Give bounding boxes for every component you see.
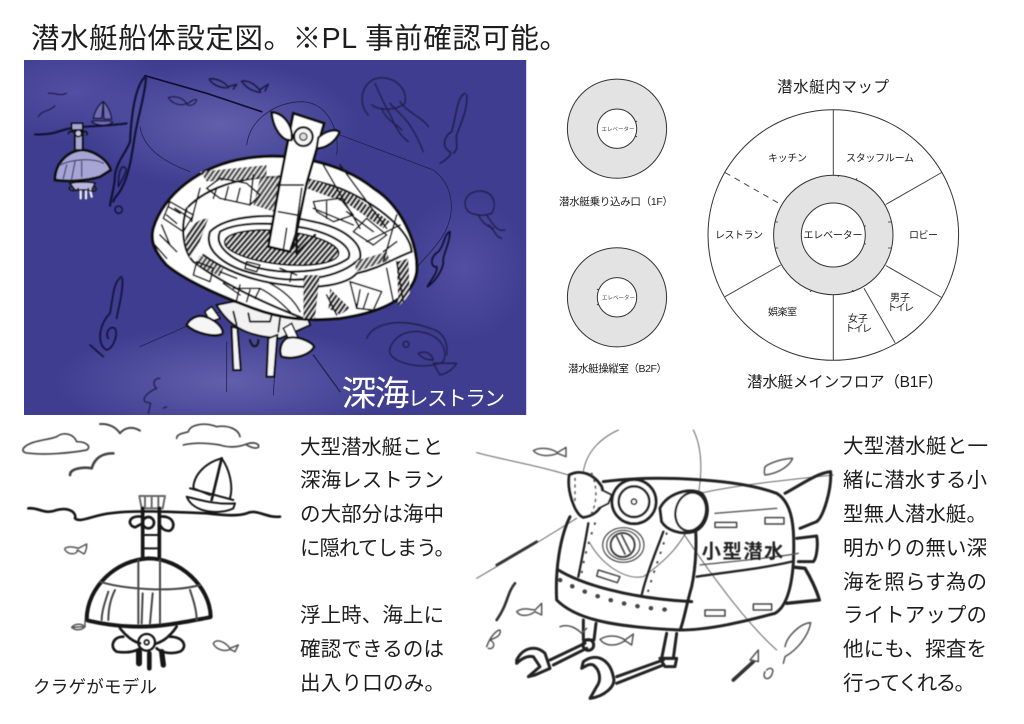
text block: submarine hidden underwater: 出入り口のみ。 (300, 672, 445, 695)
panel: surface jellyfish sketch (23, 424, 280, 668)
vents (597, 518, 784, 616)
text block: small unmanned submersible description: 緒に潜水する小 (843, 469, 987, 492)
restaurant logo text: 深海レストラン (342, 376, 505, 414)
clouds and birds (23, 424, 259, 475)
text block: submarine hidden underwater: 深海レストラン (300, 469, 444, 492)
panel: deep sea restaurant illustration (24, 60, 526, 415)
text block: small unmanned submersible description: 他にも、探査を (843, 638, 987, 661)
dome body (152, 156, 417, 320)
caption: 1F: 潜水艇乗り込み口（1F） (559, 195, 673, 208)
manipulator arms (517, 620, 677, 698)
submarine restaurant main body (152, 112, 417, 377)
small fish and seahorses (487, 447, 811, 680)
chart: main floor B1F map: ロビー (909, 230, 938, 242)
diagram: boarding floor 1F (567, 79, 667, 178)
text block: submarine hidden underwater (300, 436, 455, 695)
central hatched floor (223, 225, 340, 270)
small fish group (168, 79, 268, 105)
caption: B2F: 潜水艇操縦室（B2F） (568, 362, 667, 375)
text block: small unmanned submersible description: 行ってくれる。 (843, 672, 975, 695)
long squid (110, 77, 146, 213)
seahorse top right (440, 93, 467, 163)
title: 潜水艇船体設定図。※PL 事前確認可能。 (31, 23, 568, 55)
heading: submarine map: 潜水艇内マップ (777, 78, 889, 96)
small seahorse bottom (144, 378, 167, 413)
deep blue sea background (24, 60, 526, 415)
chart: main floor B1F map: トイレ (845, 324, 872, 335)
diagram: control room B2F (567, 248, 667, 347)
text block: small unmanned submersible description: 型無人潜水艇。 (843, 503, 987, 526)
furniture details (155, 165, 403, 315)
text block: small unmanned submersible description: ライトアップの (843, 604, 987, 627)
caption: modelled on jellyfish: クラゲがモデル (33, 677, 157, 697)
small jellyfish right (465, 191, 505, 238)
chart: main floor B1F map: スタッフルーム (846, 152, 914, 164)
text block: submarine hidden underwater: 浮上時、海上に (300, 604, 444, 627)
chart: main floor B1F map: キッチン (768, 152, 807, 164)
chart: main floor B1F map: 女子 (848, 312, 868, 325)
chart: main floor B1F map: 娯楽室 (768, 306, 797, 318)
jellyfish top right (362, 78, 428, 152)
lower hull, legs and lamps (187, 302, 314, 377)
text block: small unmanned submersible description: 明かりの無い深 (843, 537, 987, 560)
dark wall hatching (185, 165, 410, 318)
jellyfish submarine (87, 496, 211, 668)
panel: floor diagrams (559, 78, 959, 391)
fishing line (145, 76, 262, 112)
rivets (560, 523, 673, 610)
surface scene: birds, boat and small submarine (35, 93, 127, 198)
heading: main floor B1F: 潜水艇メインフロア（B1F） (747, 373, 943, 391)
chart: main floor B1F map: トイレ (887, 303, 914, 314)
chart: main floor B1F map (708, 110, 959, 360)
seahorse left (90, 277, 122, 357)
round hatch (603, 528, 644, 562)
text block: small unmanned submersible description (843, 435, 988, 695)
side lights (569, 472, 710, 534)
sailboat (187, 458, 235, 512)
interior rings (183, 177, 412, 318)
chart: main floor B1F map: エレベーター (804, 230, 862, 242)
anglerfish (367, 323, 457, 375)
hull (556, 478, 798, 630)
panel: small unmanned submersible sketch (477, 430, 833, 698)
central elevator tower (268, 113, 324, 252)
label on hull: 小型潜水 (702, 541, 783, 563)
seahorse right (427, 232, 450, 287)
text block: small unmanned submersible description: 大型潜水艇と一 (843, 435, 988, 458)
tail fins (785, 472, 831, 603)
diagram: boarding floor 1F: エレベーター (602, 125, 634, 133)
thin sketch guide lines (140, 102, 451, 395)
text block: submarine hidden underwater: 大型潜水艇こと (300, 436, 443, 459)
text block: small unmanned submersible description: 海を照らす為の (843, 571, 987, 594)
chart: main floor B1F map: 男子 (890, 292, 910, 304)
guide lines (477, 430, 833, 650)
sea surface line (28, 508, 280, 520)
small fish (65, 544, 238, 652)
chart: main floor B1F map: レストラン (715, 230, 763, 242)
text block: submarine hidden underwater: に隠れてしまう。 (300, 537, 455, 560)
text block: submarine hidden underwater: の大部分は海中 (300, 503, 444, 526)
text block: submarine hidden underwater: 確認できるのは (300, 638, 444, 661)
diagram: control room B2F: エレベーター (602, 294, 635, 302)
